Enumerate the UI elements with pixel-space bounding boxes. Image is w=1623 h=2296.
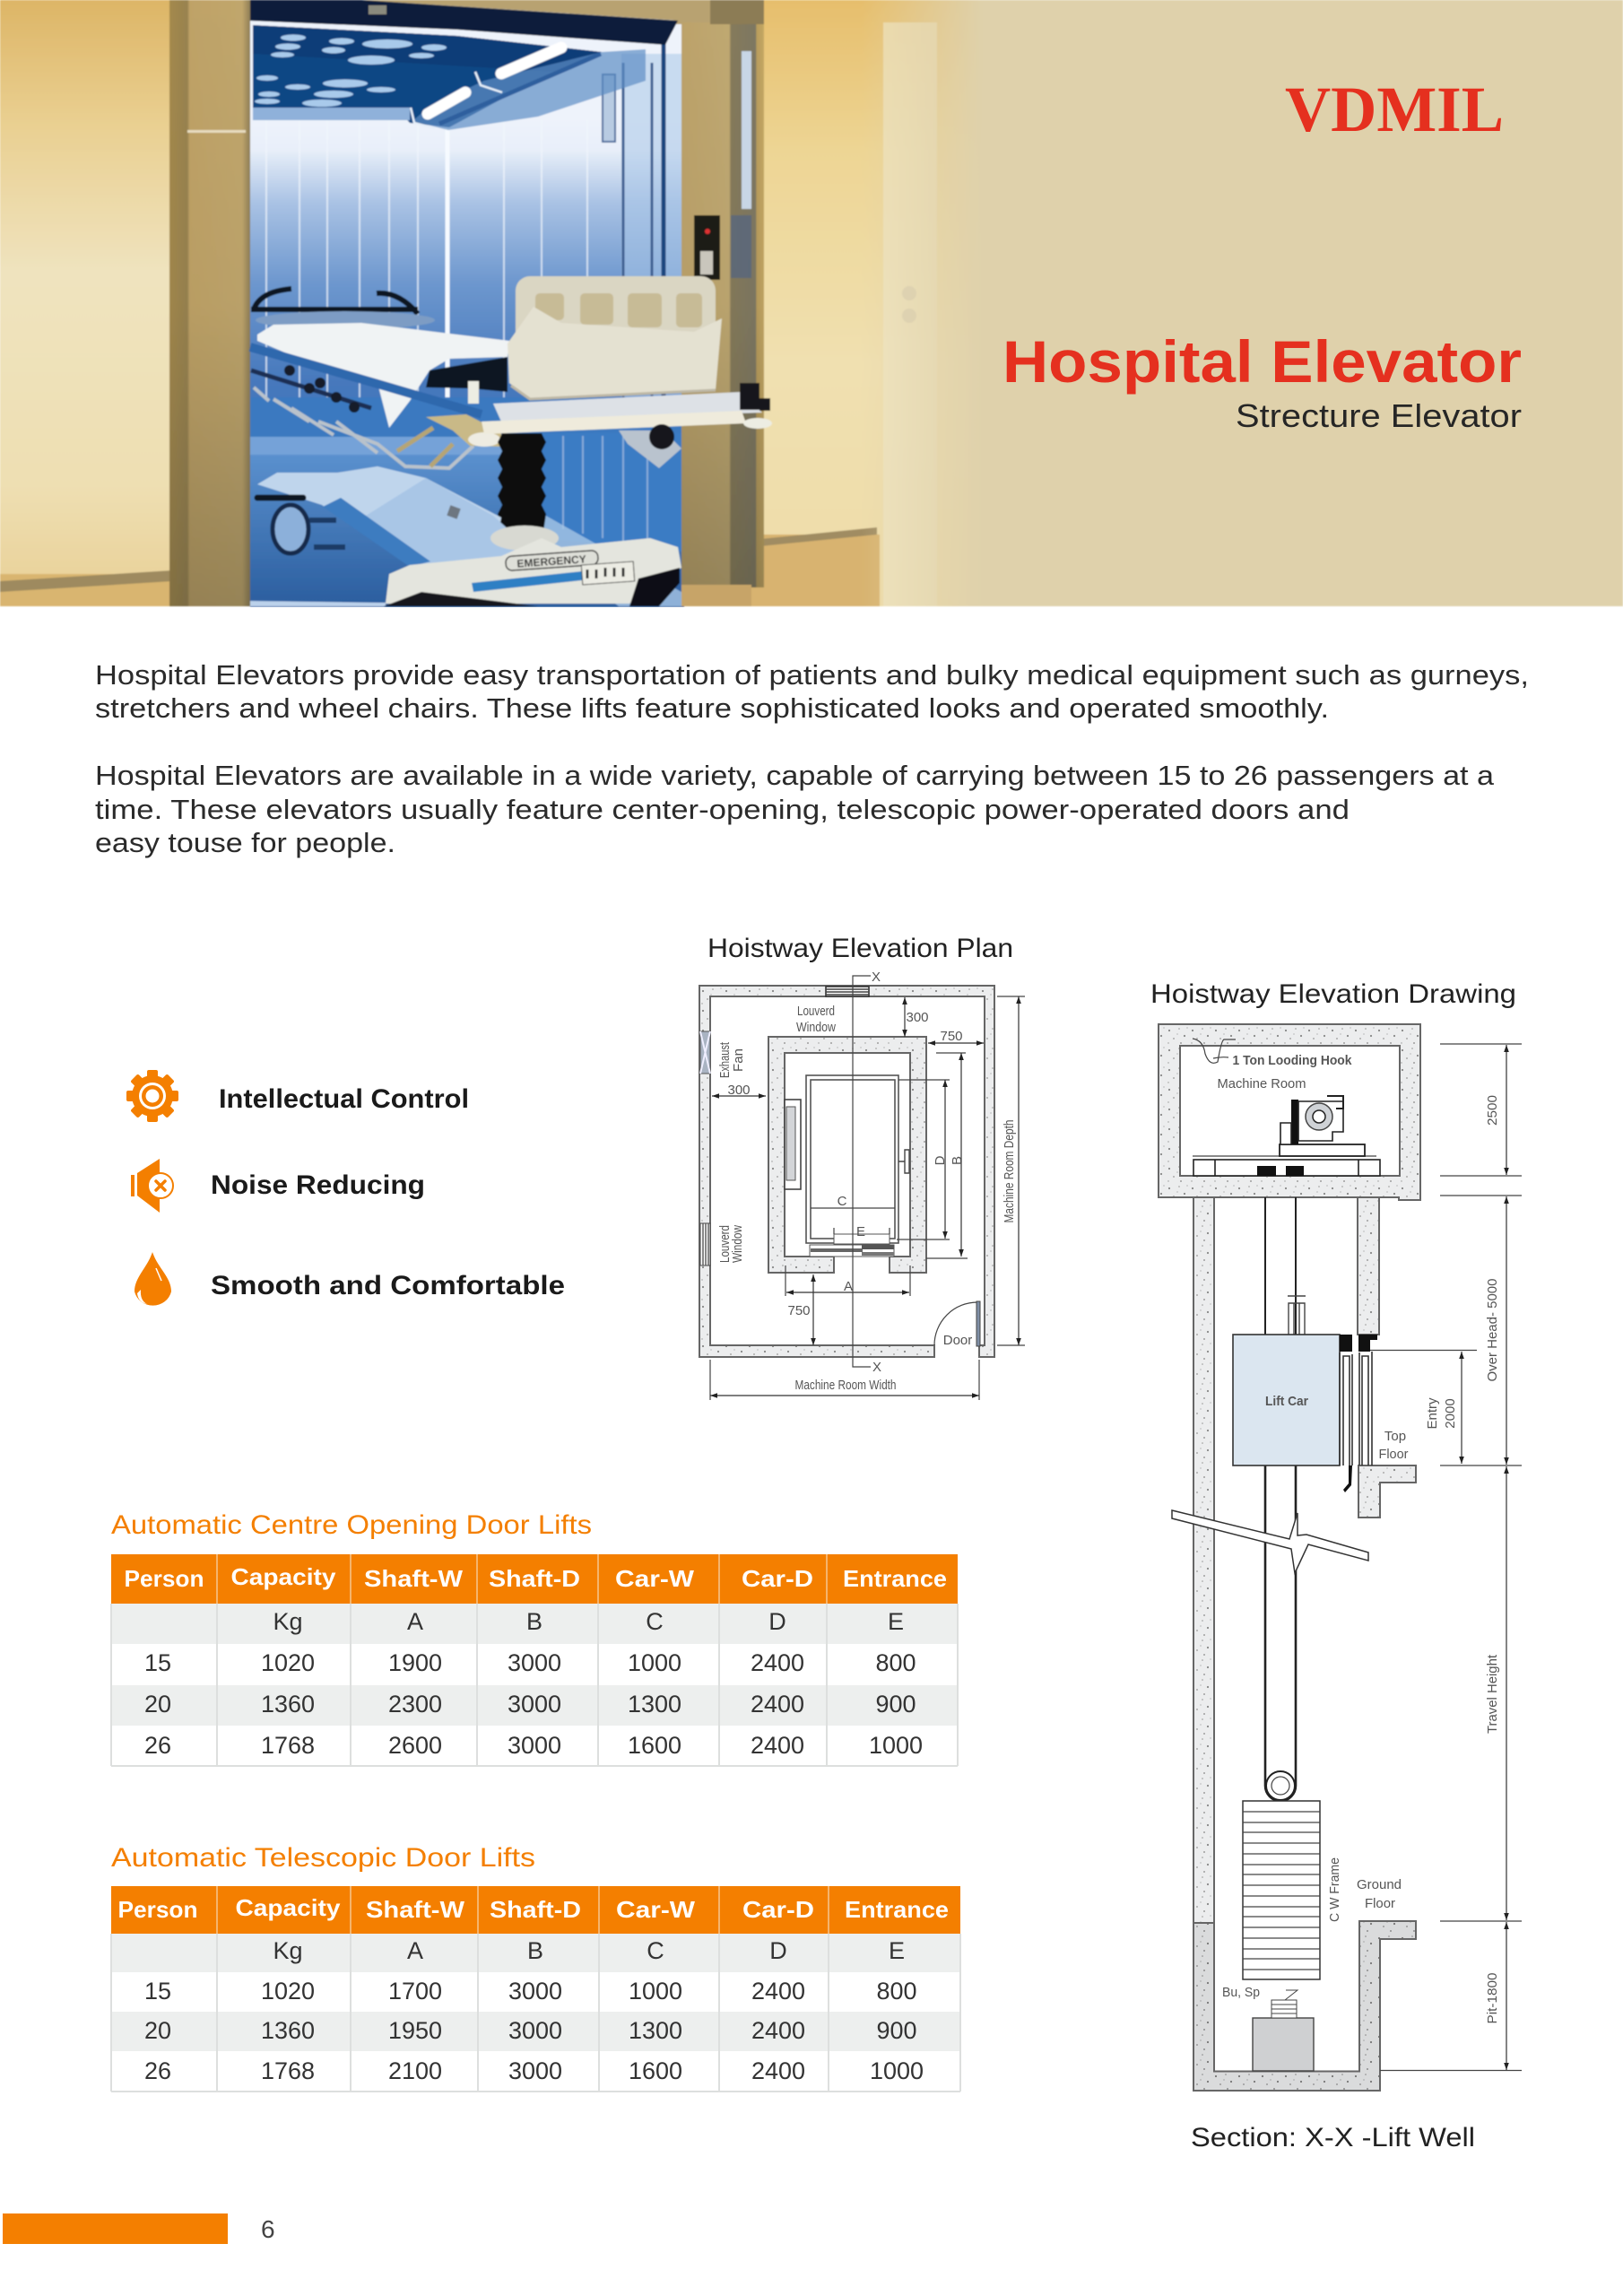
machine room walls	[699, 986, 994, 1357]
left door jamb	[169, 0, 250, 606]
hoist ropes	[1265, 1197, 1296, 1786]
knob bracket	[619, 424, 681, 468]
table 2 row 20 persons	[144, 2017, 917, 2044]
lift car	[806, 1075, 898, 1243]
table 2 header row: Car-D	[742, 1896, 814, 1923]
loading hook: 1 Ton Looding Hook	[1232, 1053, 1352, 1068]
exhaust fan	[700, 1031, 710, 1074]
table 2 row 20 persons: 2400	[751, 2017, 805, 2044]
label: Louverd Window top: Louverd	[797, 1004, 835, 1019]
intro paragraph 1: stretchers and wheel chairs. These lifts feature sophisticated looks and operated smoothly.	[95, 692, 1329, 724]
intro paragraph 2	[95, 760, 1495, 858]
table 2 row 20 persons: 900	[876, 2017, 917, 2044]
table 1 row 15 persons: 1900	[388, 1649, 442, 1676]
label: Louverd Window top: Window	[796, 1020, 836, 1035]
base pedestal	[490, 526, 559, 551]
cabin ceiling	[253, 25, 646, 130]
far side rail	[251, 289, 418, 314]
break line	[1172, 1510, 1368, 1573]
dimension: A: A	[844, 1279, 853, 1294]
label: Ground Floor: Floor	[1365, 1896, 1395, 1911]
table 1 header row: Entrance	[843, 1565, 947, 1592]
table 2 row 26 persons: 1600	[629, 2057, 682, 2084]
heading: Hoistway Elevation Plan: Hoistway Elevation Plan	[707, 934, 1013, 963]
dimension: B	[926, 1053, 968, 1258]
right shaft wall	[1358, 1197, 1379, 1335]
label: Ground Floor	[1357, 1877, 1402, 1911]
dimension extension lines	[1380, 1044, 1522, 2070]
table 2 row 15 persons: 2400	[751, 1978, 805, 2005]
right wall	[751, 0, 994, 606]
label: Bu, Sp: Bu, Sp	[1222, 1985, 1260, 2000]
table 2 row 20 persons: 1950	[388, 2017, 442, 2044]
table 2 units row: B	[527, 1937, 543, 1964]
dimension: E	[834, 1224, 890, 1239]
counterweight frame	[1243, 1801, 1320, 1979]
feature: Intellectual Control: Intellectual Control	[219, 1084, 469, 1114]
label: Top Floor	[1379, 1429, 1408, 1462]
back pad	[256, 311, 435, 329]
dimension: 300 left	[712, 1083, 766, 1098]
stretcher	[250, 276, 772, 606]
heading: Hoistway Elevation Drawing: Hoistway Elevation Drawing	[1150, 979, 1516, 1009]
dimension: A	[785, 1265, 910, 1296]
table 1 row 20 persons	[144, 1691, 916, 1718]
dimension: 300 left: 300	[727, 1083, 751, 1098]
dimension: machine room depth: Machine Room Depth	[1002, 1119, 1017, 1223]
label: Machine Room: Machine Room	[1218, 1076, 1306, 1091]
table 1 row 20 persons: 900	[875, 1691, 916, 1718]
table 1 row 20 persons: 1300	[628, 1691, 681, 1718]
emergency label: EMERGENCY	[516, 552, 586, 570]
title: Hospital Elevator: Hospital Elevator	[1002, 328, 1522, 395]
table 1 units row	[273, 1608, 904, 1635]
table 1 header row: Shaft-W	[364, 1565, 464, 1592]
table 1 row 20 persons: 1360	[261, 1691, 315, 1718]
table 2 row 15 persons: 1700	[388, 1978, 442, 2005]
table 2 row 15 persons: 1020	[261, 1978, 315, 2005]
door	[934, 1301, 980, 1348]
silver handles	[254, 387, 473, 468]
base under-deck	[257, 466, 501, 565]
page number: 6	[261, 2215, 275, 2243]
table 1 header row	[111, 1554, 958, 1604]
label: Exhaust Fan: Exhaust	[717, 1041, 733, 1078]
left louvered window	[700, 1223, 710, 1265]
feature list	[126, 1070, 565, 1306]
subtitle: Strecture Elevator: Strecture Elevator	[1236, 397, 1522, 434]
table 2 units row: E	[889, 1937, 905, 1964]
table 2 row 15 persons: 800	[876, 1978, 917, 2005]
dimension: C: C	[838, 1194, 847, 1209]
table 2 units row	[273, 1937, 905, 1964]
dimension: 2500: 2500	[1485, 1095, 1500, 1126]
intro paragraph 2: easy touse for people.	[95, 827, 395, 858]
car hitch	[1288, 1296, 1306, 1335]
table 1 row 20 persons: 2400	[751, 1691, 804, 1718]
left wall	[0, 0, 172, 606]
hero banner photo: hospital elevator with stretcher	[0, 0, 1623, 607]
table 1 row 15 persons: 3000	[508, 1649, 561, 1676]
landing door	[1358, 1335, 1377, 1465]
table 1 row 15 persons	[144, 1649, 916, 1676]
table 2 row 15 persons: 15	[144, 1978, 171, 2005]
counterweight	[785, 1100, 801, 1189]
label: Louverd Window left: Window	[730, 1225, 745, 1263]
table 2 heading: Automatic Telescopic Door Lifts	[111, 1843, 535, 1873]
dimension: machine room depth	[997, 996, 1025, 1345]
caption: Section X-X Lift Well: Section: X-X -Lift Well	[1191, 2123, 1475, 2152]
machine room concrete	[1159, 1024, 1420, 1200]
label: Top Floor: Floor	[1379, 1447, 1408, 1462]
left shaft wall	[1193, 1197, 1214, 1923]
top floor slab	[1358, 1465, 1416, 1518]
cream door beside elevator	[883, 22, 937, 606]
table 2 header row: Person	[118, 1896, 197, 1923]
table 2 row 20 persons: 3000	[508, 2017, 562, 2044]
table 2 row 26 persons: 1768	[261, 2057, 315, 2084]
dimension: C	[811, 1194, 895, 1209]
table 1 row 20 persons: 2300	[388, 1691, 442, 1718]
table 1 row 26 persons: 1600	[628, 1732, 681, 1759]
feature: Noise Reducing: Noise Reducing	[211, 1170, 425, 1200]
table 1 header row: Person	[124, 1565, 204, 1592]
icon: gear	[126, 1070, 178, 1122]
dimension: pit 1800: Pit-1800	[1485, 1973, 1500, 2023]
dimension: 750 bottom	[787, 1274, 813, 1345]
table 2 header row: Shaft-W	[366, 1896, 465, 1923]
dimension: over head 5000: Over Head- 5000	[1485, 1279, 1500, 1381]
table 2 row 20 persons: 1360	[261, 2017, 315, 2044]
diagram: hoistway elevation plan	[699, 970, 1025, 1400]
table 1 units row: C	[646, 1608, 664, 1635]
table 1 row 15 persons: 2400	[751, 1649, 804, 1676]
table 2 header row: Shaft-D	[490, 1896, 581, 1923]
near wheel	[629, 568, 680, 606]
dark under-mattress	[426, 357, 508, 392]
base housing	[386, 538, 681, 604]
section line X-X: X	[872, 1360, 881, 1375]
intro paragraph 1	[95, 659, 1529, 724]
shaft walls	[768, 1037, 926, 1273]
lift car	[1233, 1335, 1340, 1465]
table 1: automatic centre opening door lifts	[111, 1554, 958, 1766]
diagram: hoistway elevation drawing	[1159, 1024, 1522, 2091]
table 2 row 26 persons: 2100	[388, 2057, 442, 2084]
table 1 header row: Car-D	[742, 1565, 813, 1592]
table 1 row 26 persons: 2600	[388, 1732, 442, 1759]
intro paragraph 1: Hospital Elevators provide easy transportation of patients and bulky medical equipment such as gurneys,	[95, 659, 1529, 691]
icon: muted speaker	[131, 1159, 173, 1213]
car doors	[810, 1234, 894, 1257]
dimension: travel height: Travel Height	[1485, 1654, 1500, 1734]
car door	[1340, 1335, 1352, 1492]
dimension: machine room width: Machine Room Width	[794, 1378, 897, 1393]
table 1 header row: Shaft-D	[489, 1565, 580, 1592]
dimension: entry 2000	[1370, 1351, 1477, 1464]
traction machine	[1193, 1096, 1380, 1176]
table 2 units row: D	[769, 1937, 787, 1964]
table 1 units row: E	[888, 1608, 904, 1635]
table 2: automatic telescopic door lifts	[111, 1886, 960, 2092]
label: Top Floor: Top	[1384, 1429, 1406, 1444]
hydraulic column	[498, 433, 546, 532]
brand badge	[581, 561, 635, 585]
logo: VDMIL: VDMIL	[1285, 74, 1504, 145]
elevator cabin interior	[249, 0, 684, 607]
table 1 header row: Capacity	[231, 1563, 336, 1590]
patient platform	[493, 392, 762, 422]
pit	[1193, 1921, 1416, 2091]
table 1 heading: Automatic Centre Opening Door Lifts	[111, 1510, 592, 1540]
table 2 header row: Entrance	[845, 1896, 949, 1923]
dimension: B: B	[950, 1156, 965, 1165]
dimension: D	[897, 1080, 950, 1239]
table 1 units row: B	[526, 1608, 542, 1635]
intro paragraph 2: Hospital Elevators are available in a wide variety, capable of carrying between 15 to 26 passengers at a	[95, 760, 1495, 791]
table 2 header row: Car-W	[616, 1896, 696, 1923]
table 2 row 26 persons	[144, 2057, 924, 2084]
table 2 header row: Capacity	[235, 1894, 341, 1921]
table 1 row 26 persons: 1768	[261, 1732, 315, 1759]
dimension: machine room width	[710, 1360, 979, 1400]
table 1 units row: A	[407, 1608, 423, 1635]
beige title panel	[861, 0, 1623, 606]
table 1 row 15 persons: 1000	[628, 1649, 681, 1676]
table 1 row 26 persons	[144, 1732, 923, 1759]
right door jamb	[681, 0, 764, 606]
emergency label	[506, 550, 598, 571]
buffer	[1253, 1990, 1314, 2071]
guide rail	[898, 1150, 909, 1173]
dimension: 750 right	[928, 1029, 984, 1044]
table 2 units row: Kg	[273, 1937, 303, 1964]
table 2 row bands and grid	[111, 1934, 960, 2092]
label: Louverd Window top	[796, 1004, 836, 1035]
dimension: entry 2000: Entry	[1425, 1397, 1440, 1430]
label: C W Frame: C W Frame	[1327, 1857, 1342, 1922]
table 2 units row: A	[407, 1937, 423, 1964]
table 1 row 20 persons: 20	[144, 1691, 171, 1718]
label: Louverd Window left: Louverd	[717, 1225, 733, 1263]
label: Exhaust Fan	[717, 1041, 746, 1078]
table 1 row bands and grid	[111, 1604, 958, 1766]
table 2 row 20 persons: 20	[144, 2017, 171, 2044]
table 1 header row: Car-W	[615, 1565, 695, 1592]
rail grips	[284, 365, 360, 413]
label: Ground Floor: Ground	[1357, 1877, 1402, 1892]
table 2 row 15 persons: 3000	[508, 1978, 562, 2005]
table 1 row 15 persons: 15	[144, 1649, 171, 1676]
caster wheel	[257, 498, 345, 553]
loading hook	[1193, 1039, 1352, 1068]
dimension: D: D	[933, 1155, 948, 1165]
footer accent bar	[3, 2213, 228, 2244]
table 1 row 26 persons: 1000	[869, 1732, 923, 1759]
intro paragraph 2: time. These elevators usually feature center-opening, telescopic power-operated doors and	[95, 794, 1350, 825]
table 1 row 15 persons: 800	[875, 1649, 916, 1676]
table 2 row 26 persons: 1000	[870, 2057, 924, 2084]
table 2 row 26 persons: 3000	[508, 2057, 562, 2084]
mattress sheet	[257, 323, 509, 428]
dimension: E: E	[856, 1224, 865, 1239]
table 1 units row: Kg	[273, 1608, 303, 1635]
dimension: entry 2000: 2000	[1443, 1398, 1458, 1429]
lift car: Lift Car	[1265, 1394, 1308, 1409]
pulley	[1265, 1771, 1296, 1801]
dimension: 300 top: 300	[906, 1010, 929, 1025]
end clamps	[468, 381, 772, 429]
table 2 row 20 persons: 1300	[629, 2017, 682, 2044]
section line X-X	[853, 970, 881, 1375]
table 1 row 26 persons: 3000	[508, 1732, 561, 1759]
icon: water drop	[135, 1252, 171, 1306]
table 2 row 15 persons: 1000	[629, 1978, 682, 2005]
feature: Smooth and Comfortable: Smooth and Comfortable	[211, 1271, 565, 1300]
table 1 row 26 persons: 26	[144, 1732, 171, 1759]
table 1 row 20 persons: 3000	[508, 1691, 561, 1718]
table 1 units row: D	[768, 1608, 786, 1635]
dimension: 750 right: 750	[940, 1029, 963, 1044]
label: Exhaust Fan: Fan	[731, 1048, 746, 1072]
table 1 row 26 persons: 2400	[751, 1732, 804, 1759]
top louvered window	[826, 987, 869, 996]
section line X-X: X	[872, 970, 881, 985]
table 2 row 26 persons: 26	[144, 2057, 171, 2084]
table 2 row 26 persons: 2400	[751, 2057, 805, 2084]
call button panel	[694, 215, 720, 280]
door: Door	[943, 1333, 972, 1348]
table 2 header row	[111, 1886, 960, 1934]
dimension: 300 top	[905, 997, 929, 1037]
headboard	[516, 276, 716, 348]
table 2 units row: C	[647, 1937, 664, 1964]
label: Louverd Window left	[717, 1225, 745, 1263]
table 1 row 15 persons: 1020	[261, 1649, 315, 1676]
lintel above door	[249, 0, 764, 45]
dimension: 750 bottom: 750	[787, 1303, 811, 1318]
table 2 row 15 persons	[144, 1978, 917, 2005]
blue side rail	[250, 347, 482, 414]
